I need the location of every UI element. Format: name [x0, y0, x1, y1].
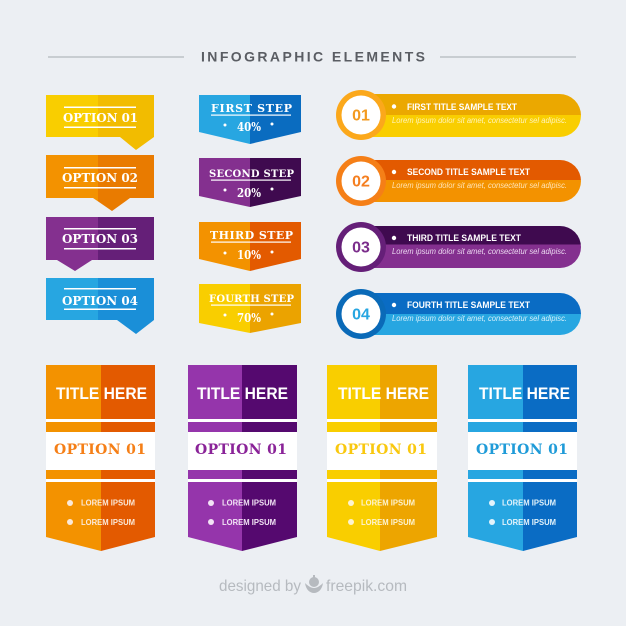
banner panel: blue: LOREM IPSUM	[502, 498, 556, 508]
banner panel: yellow: TITLE HERE	[338, 384, 429, 403]
pill 01: first title: FIRST TITLE SAMPLE TEXT	[407, 102, 517, 112]
banner panel: blue: TITLE HERE	[479, 384, 570, 403]
footer credit: freepik.com	[326, 578, 407, 595]
pill 03: third title	[336, 222, 581, 272]
pill 04: fourth title: FOURTH TITLE SAMPLE TEXT	[407, 300, 530, 310]
banner panel: yellow: OPTION 01	[335, 442, 427, 458]
banner panel: blue	[468, 365, 577, 551]
banner panel: purple: OPTION 01	[195, 442, 287, 458]
step badge: fourth step: FOURTH STEP	[209, 294, 294, 305]
option tag 03	[46, 217, 154, 271]
pill 04: fourth title: Lorem ipsum dolor sit amet, consectetur sel adipisc.	[392, 314, 567, 323]
step badge: first step: 40%	[237, 120, 262, 134]
pill 02: second title: SECOND TITLE SAMPLE TEXT	[407, 167, 530, 177]
step badge: third step: THIRD STEP	[210, 229, 293, 242]
step badge: fourth step	[199, 284, 301, 333]
footer credit: designed by	[219, 578, 301, 595]
icon: freepik mascot	[305, 575, 323, 593]
banner panel: purple: TITLE HERE	[197, 384, 288, 403]
banner panel: orange: OPTION 01	[54, 442, 146, 458]
banner panel: yellow: LOREM IPSUM	[361, 498, 415, 508]
option tag 01	[46, 95, 154, 150]
pill 04: fourth title	[336, 289, 581, 339]
pill 02: second title: Lorem ipsum dolor sit amet, consectetur sel adipisc.	[392, 181, 567, 190]
pill 01: first title: Lorem ipsum dolor sit amet, consectetur sel adipisc.	[392, 116, 567, 125]
banner panel: purple: LOREM IPSUM	[222, 518, 276, 527]
banner panel: purple: LOREM IPSUM	[222, 498, 276, 508]
footer credit	[219, 575, 407, 595]
step badge: first step	[199, 95, 301, 144]
pill 01: first title	[336, 90, 581, 140]
step badge: first step: FIRST STEP	[211, 102, 292, 115]
pill 01: first title: 01	[352, 108, 370, 124]
banner panel: yellow	[327, 365, 437, 551]
banner panel: orange	[46, 365, 155, 551]
banner panel: yellow: LOREM IPSUM	[361, 518, 415, 527]
banner panel: blue: OPTION 01	[476, 442, 568, 458]
pill 02: second title	[336, 156, 581, 206]
option tag 02	[46, 155, 154, 211]
step badge: third step: 10%	[237, 248, 262, 262]
banner panel: orange: TITLE HERE	[56, 384, 147, 403]
step badge: second step: SECOND STEP	[209, 169, 294, 180]
option tag 04	[46, 278, 154, 334]
step badge: second step	[199, 158, 301, 207]
banner panel: purple	[188, 365, 297, 551]
banner panel: blue: LOREM IPSUM	[502, 518, 556, 527]
option tag 02: OPTION 02	[62, 170, 138, 185]
pill 02: second title: 02	[352, 174, 370, 190]
banner panel: orange: LOREM IPSUM	[81, 518, 135, 527]
banner panel: orange: LOREM IPSUM	[81, 498, 135, 508]
option tag 03: OPTION 03	[62, 231, 138, 246]
pill 03: third title: Lorem ipsum dolor sit amet, consectetur sel adipisc.	[392, 247, 567, 256]
title: infographic elements: INFOGRAPHIC ELEMENTS	[201, 48, 425, 64]
pill 04: fourth title: 04	[352, 306, 370, 324]
option tag 04: OPTION 04	[62, 293, 138, 308]
step badge: fourth step: 70%	[237, 311, 262, 325]
step badge: second step: 20%	[237, 186, 262, 200]
option tag 01: OPTION 01	[63, 110, 138, 125]
pill 03: third title: THIRD TITLE SAMPLE TEXT	[407, 233, 521, 243]
step badge: third step	[199, 222, 301, 271]
pill 03: third title: 03	[352, 240, 370, 256]
